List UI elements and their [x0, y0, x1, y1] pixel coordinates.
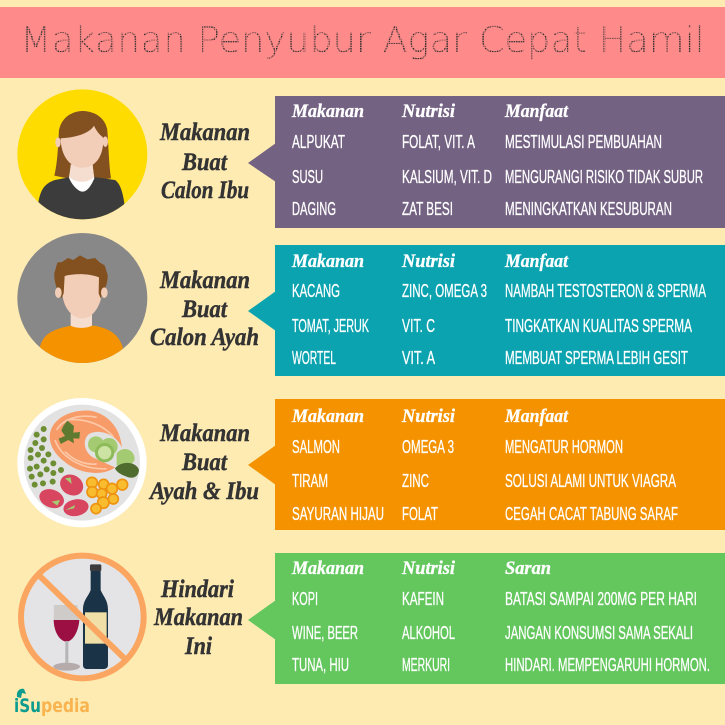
icon: man avatar [17, 233, 147, 367]
panel: calon ayah table: Makanan [291, 251, 364, 272]
heading: Makanan Buat Calon Ibu: Makanan [159, 119, 250, 146]
heading: Makanan Buat Calon Ibu: Buat [181, 149, 228, 176]
heading: Makanan Buat Ayah & Ibu [148, 420, 259, 505]
carrots [87, 477, 128, 514]
panel: calon ibu table: DAGING [292, 199, 336, 219]
salmon [50, 411, 122, 473]
heading: Makanan Buat Calon Ayah [150, 267, 259, 351]
panel: calon ayah table: Nutrisi [401, 251, 456, 272]
panel: ayah dan ibu table: MENGATUR HORMON [505, 437, 623, 457]
panel: hindari table [248, 553, 725, 684]
panel: ayah dan ibu table: ZINC [402, 471, 429, 491]
heading: Makanan Buat Calon Ibu: Calon Ibu [161, 177, 249, 204]
panel: calon ibu table: ALPUKAT [292, 132, 345, 152]
heading: Makanan Buat Ayah & Ibu: Makanan [159, 420, 250, 447]
icon: food plate [17, 398, 147, 527]
panel: calon ibu table: ZAT BESI [402, 199, 453, 219]
meat [37, 470, 90, 518]
heading: Hindari Makanan Ini [153, 576, 243, 660]
panel: calon ibu table: KALSIUM, VIT. D [402, 167, 492, 187]
logo: iSupedia [14, 689, 90, 717]
panel: calon ibu table: FOLAT, VIT. A [402, 132, 475, 152]
heading: Makanan Buat Ayah & Ibu: Ayah & Ibu [148, 478, 259, 505]
panel: ayah dan ibu table: Manfaat [504, 406, 569, 427]
panel: calon ayah table: ZINC, OMEGA 3 [402, 281, 487, 301]
panel: hindari table: KAFEIN [402, 589, 444, 609]
panel: calon ibu table: SUSU [292, 167, 323, 187]
panel: ayah dan ibu table [248, 399, 725, 530]
title banner: Makanan Penyubur Agar Cepat Hamil [20, 20, 705, 61]
peas [27, 426, 64, 488]
panel: hindari table: WINE, BEER [292, 623, 358, 643]
panel: calon ibu table: Makanan [291, 101, 364, 122]
panel: hindari table: ALKOHOL [402, 623, 455, 643]
panel: calon ayah table: TOMAT, JERUK [292, 316, 369, 336]
heading: Hindari Makanan Ini: Makanan [153, 604, 243, 631]
heading: Hindari Makanan Ini: Ini [184, 633, 212, 660]
panel: hindari table: Saran [505, 558, 551, 579]
panel: ayah dan ibu table: Nutrisi [401, 406, 456, 427]
panel: calon ayah table: VIT. A [402, 348, 435, 368]
panel: hindari table: Nutrisi [401, 558, 456, 579]
heading: Makanan Buat Calon Ibu [159, 119, 250, 204]
panel: calon ayah table: KACANG [292, 281, 340, 301]
panel: ayah dan ibu table: SAYURAN HIJAU [292, 504, 384, 524]
wine glass [54, 605, 79, 642]
panel: calon ibu table: Manfaat [504, 101, 569, 122]
heading: Hindari Makanan Ini: Hindari [160, 576, 234, 603]
title banner [0, 7, 725, 78]
panel: ayah dan ibu table: FOLAT [402, 504, 438, 524]
panel: calon ayah table: Manfaat [504, 251, 569, 272]
panel: ayah dan ibu table: OMEGA 3 [402, 437, 454, 457]
heading: Makanan Buat Ayah & Ibu: Buat [181, 449, 228, 476]
panel: ayah dan ibu table: SALMON [292, 437, 340, 457]
panel: hindari table: TUNA, HIU [292, 655, 349, 675]
heading: Makanan Buat Calon Ayah: Buat [181, 296, 228, 323]
panel: hindari table: Makanan [291, 558, 364, 579]
panel: calon ayah table: VIT. C [402, 316, 435, 336]
panel: ayah dan ibu table: TIRAM [292, 471, 328, 491]
panel: calon ibu table: Nutrisi [401, 101, 456, 122]
lettuce [117, 449, 135, 466]
heading: Makanan Buat Calon Ayah: Calon Ayah [150, 324, 259, 351]
logo: iSupedia: iSu [14, 695, 41, 717]
prohibition ring [21, 556, 144, 678]
panel: calon ibu table [248, 96, 725, 228]
panel: calon ayah table: WORTEL [292, 348, 336, 368]
icon: no alcohol sign [21, 555, 144, 679]
panel: hindari table: KOPI [292, 589, 318, 609]
icon: woman avatar [17, 89, 147, 222]
wine bottle [83, 565, 108, 669]
panel: calon ayah table [248, 245, 725, 376]
logo: iSupedia: pedia [41, 695, 90, 717]
heading: Makanan Buat Calon Ayah: Makanan [159, 267, 250, 294]
panel: hindari table: MERKURI [402, 655, 450, 675]
panel: ayah dan ibu table: Makanan [291, 406, 364, 427]
